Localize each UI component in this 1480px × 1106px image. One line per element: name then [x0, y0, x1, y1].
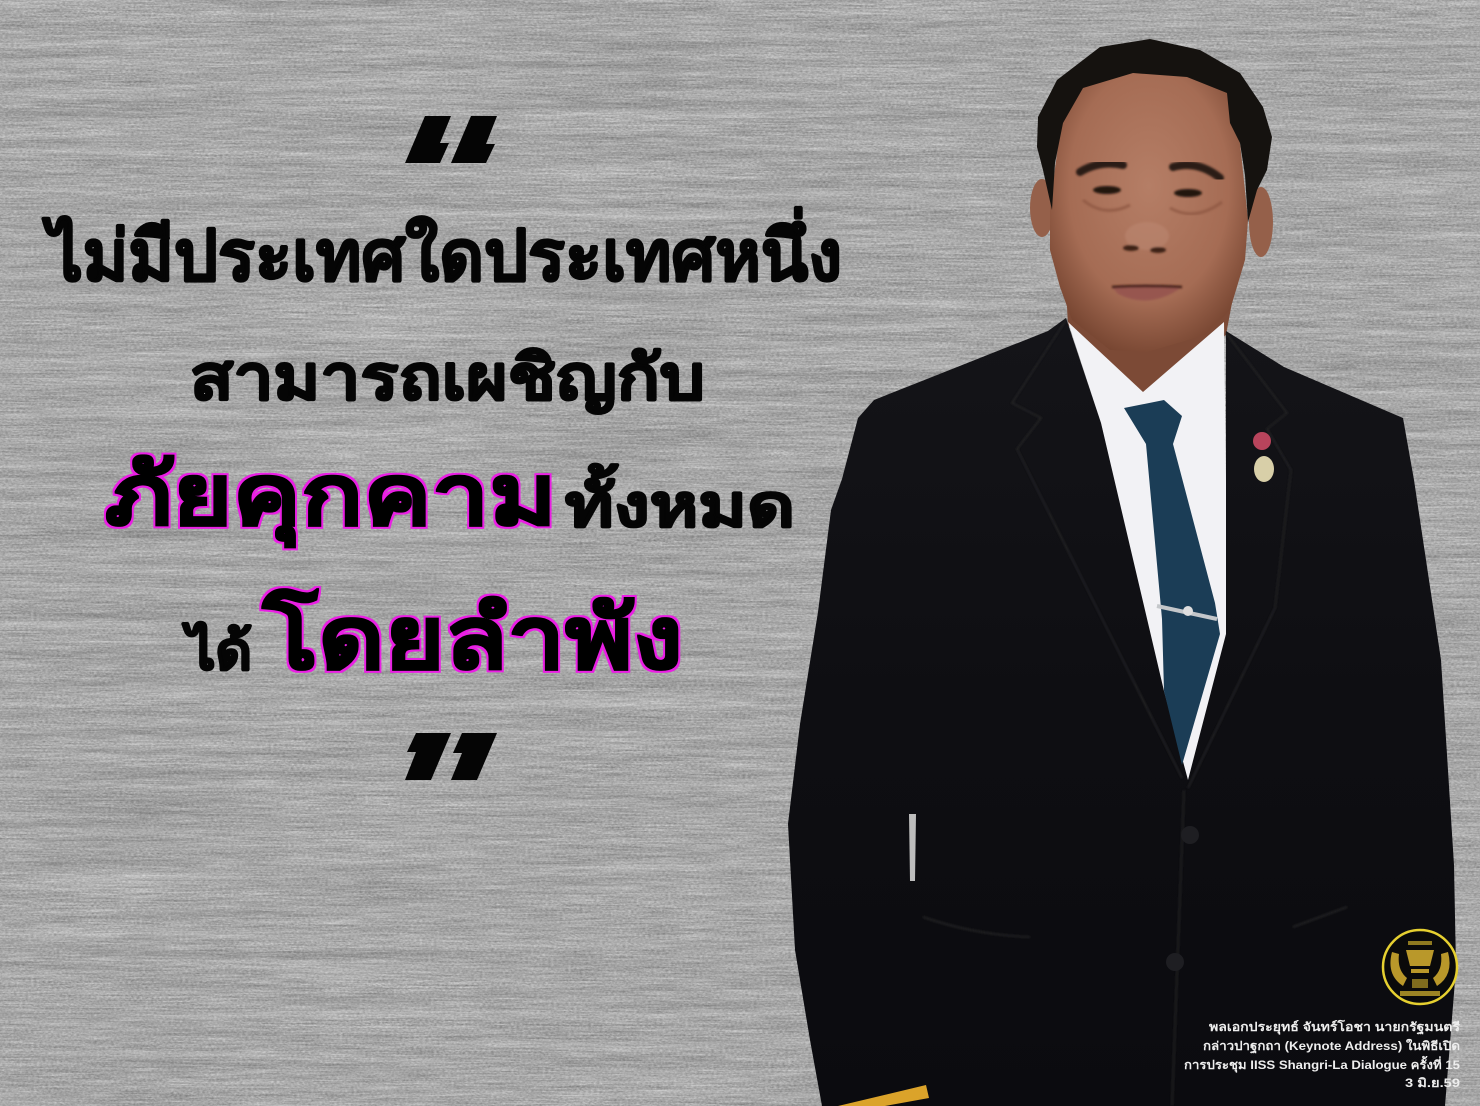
lapel pin: red [1253, 432, 1271, 450]
eye bags [1083, 200, 1222, 214]
attribution text [1184, 1019, 1461, 1090]
nose [1123, 222, 1169, 253]
suit jacket [788, 318, 1456, 1106]
wrist with yellow band [838, 1085, 929, 1106]
attribution line 3: การประชุม IISS Shangri-La Dialogue ครั้งที่ 15 [1184, 1055, 1460, 1073]
highlighted phrase: threats: ภัยคุกคาม [105, 448, 557, 548]
lead word of line 4: ได้ [182, 621, 252, 681]
portrait: man in dark suit [788, 39, 1456, 1106]
gap between arm and torso [909, 814, 916, 881]
jacket buttons [1166, 826, 1199, 971]
seal emblem [1390, 941, 1450, 996]
jacket lapels and seams [923, 320, 1347, 1106]
quote line 2: สามารถเผชิญกับ [190, 344, 705, 414]
government seal [1383, 930, 1457, 1004]
quote line 1: ไม่มีประเทศใดประเทศหนึ่ง [41, 206, 842, 295]
closing quotation mark [405, 733, 497, 780]
eyes [1093, 186, 1202, 197]
lapel pin: gold [1254, 456, 1274, 482]
opening quotation mark [405, 116, 497, 163]
tie [1124, 400, 1220, 765]
highlighted phrase: alone: โดยลำพัง [262, 588, 683, 687]
hair [1037, 39, 1272, 222]
attribution line 4: 3 มิ.ย.59 [1405, 1076, 1460, 1090]
quote line 4 [182, 588, 683, 687]
neck [1065, 270, 1238, 396]
quote line 3 [105, 448, 795, 548]
eyebrows [1080, 164, 1220, 178]
tie clip [1157, 606, 1217, 619]
attribution line 1: พลเอกประยุทธ์ จันทร์โอชา นายกรัฐมนตรี [1209, 1019, 1461, 1035]
attribution line 2: กล่าวปาฐกถา (Keynote Address) ในพิธีเปิด [1203, 1038, 1460, 1054]
mouth [1112, 284, 1182, 301]
face [1050, 66, 1248, 352]
ears [1030, 179, 1273, 257]
remainder of line 3: ทั้งหมด [565, 464, 795, 539]
shirt [1068, 322, 1228, 790]
